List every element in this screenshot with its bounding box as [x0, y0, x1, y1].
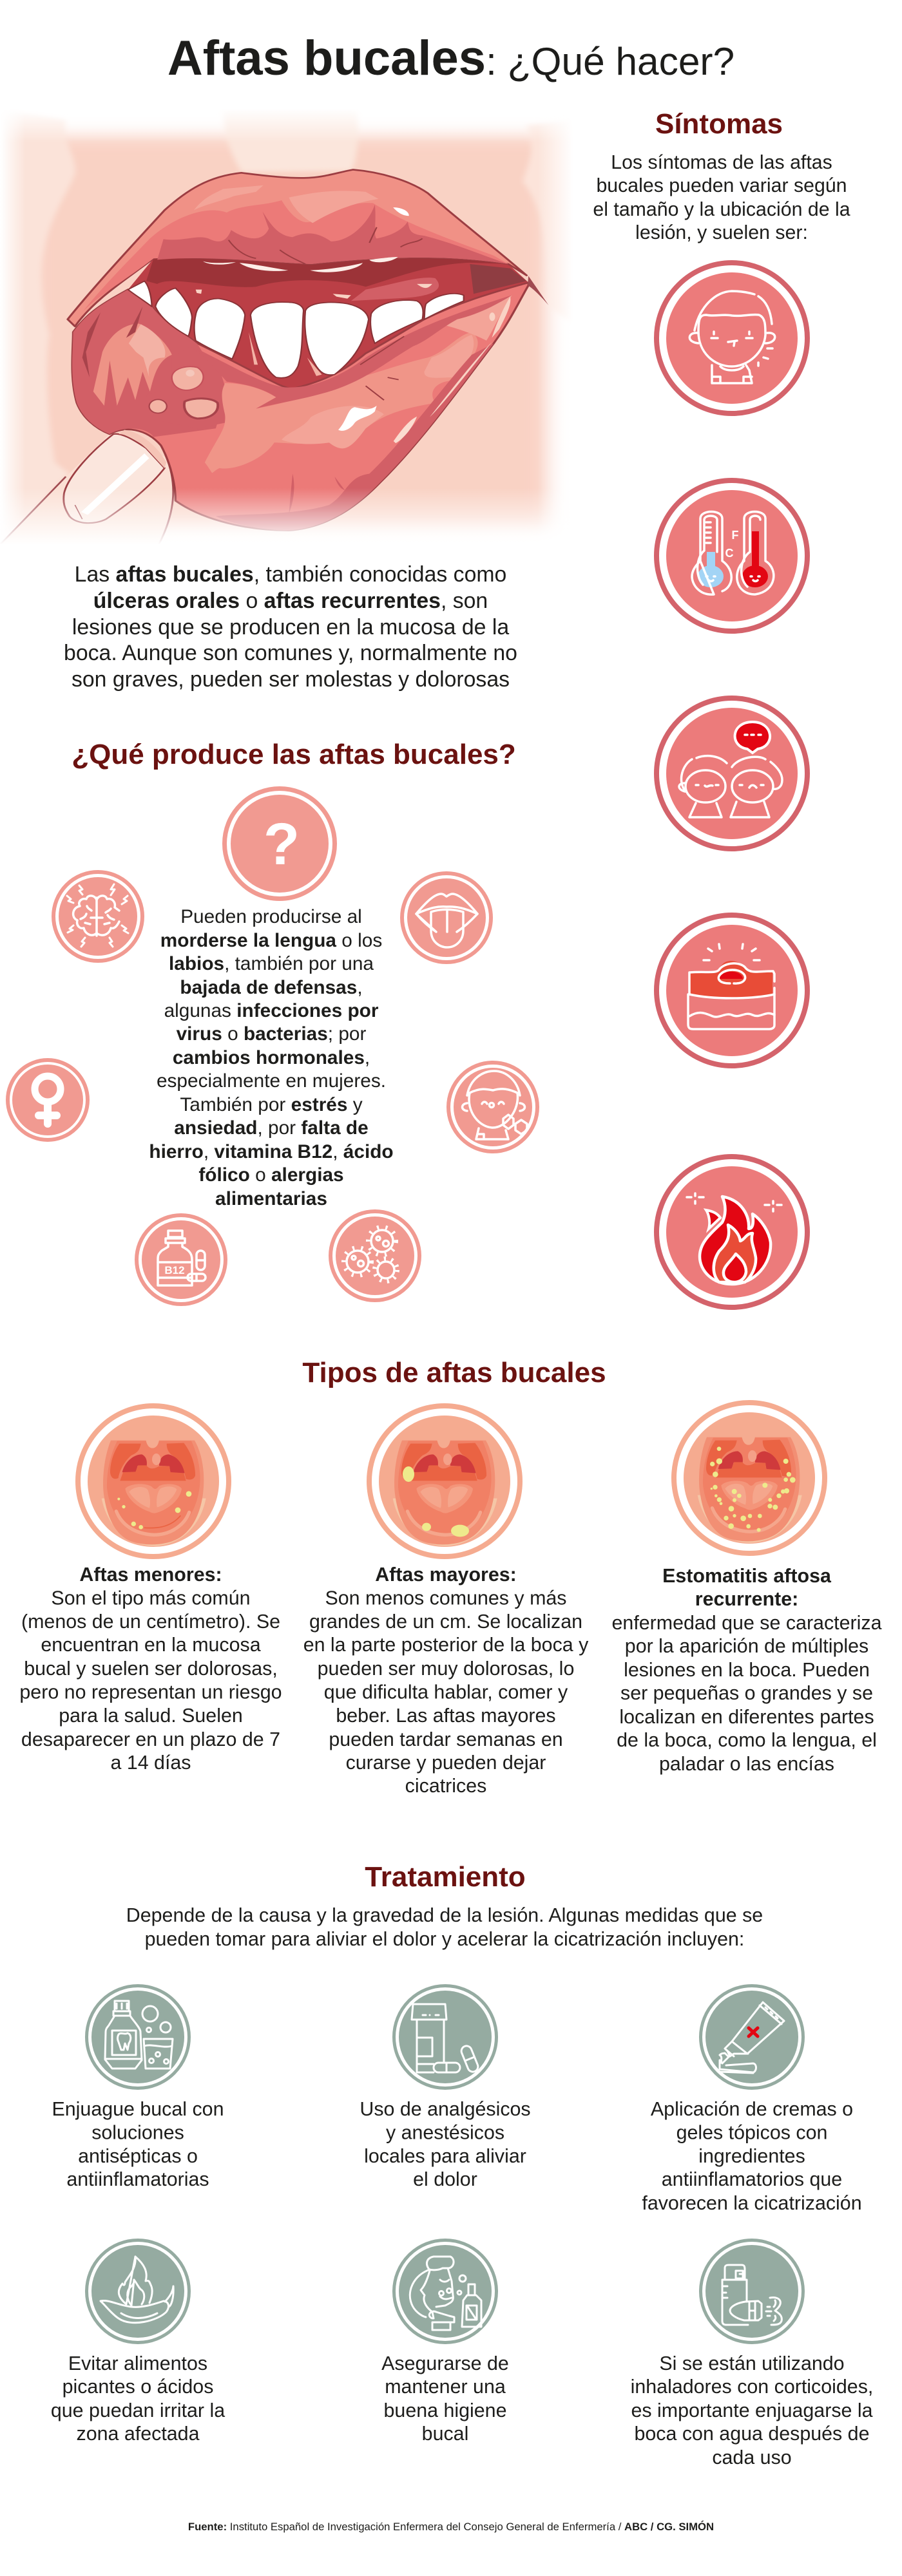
text: treatment 4: picantes o ácidos [62, 2376, 213, 2398]
icon: throat recurrent stomatitis [674, 1403, 825, 1553]
icon: tongue [402, 873, 491, 962]
text: treatment 2: y anestésicos [386, 2121, 504, 2143]
text: causes: hierro, vitamina B12, ácido [149, 1141, 394, 1162]
text: aftas menores [19, 1564, 282, 1774]
text: estomatitis aftosa recurrente: paladar o las encías [659, 1753, 834, 1775]
heading: tratamiento: Tratamiento [365, 1861, 526, 1893]
icon: vitamin B12: B12 [164, 1264, 185, 1276]
text: aftas mayores: curarse y pueden dejar [346, 1752, 546, 1774]
icon: mouthwash [86, 1986, 189, 2088]
text: treatment 3: geles tópicos con [676, 2121, 827, 2143]
intro text: Las aftas bucales, también conocidas como [75, 562, 506, 587]
icon: inhaler [701, 2240, 803, 2343]
icon: thermometers [657, 480, 807, 631]
text: treatment 6: es importante enjuagarse la [631, 2400, 873, 2421]
text: síntomas intro: el tamaño y la ubicación de la [593, 199, 850, 220]
text: tratamiento intro: Depende de la causa y la gravedad de la lesión. Algunas medidas que se [126, 1904, 763, 1926]
footer: source: Fuente: Instituto Español de Investigación Enfermera del Consejo General de Enfermería / ABC / CG. SIMÓN [188, 2521, 714, 2533]
text: treatment 1: antisépticas o [78, 2145, 198, 2167]
text: causes: También por estrés y [180, 1094, 363, 1115]
text: treatment 6: boca con agua después de [634, 2423, 870, 2445]
text: treatment 5: mantener una [385, 2376, 506, 2398]
text: treatment 5 [381, 2353, 509, 2445]
text: treatment 1: soluciones [91, 2121, 184, 2143]
text: estomatitis aftosa recurrente: por la aparición de múltiples [625, 1635, 868, 1657]
text: aftas mayores [303, 1564, 589, 1797]
text: aftas menores: encuentran en la mucosa [41, 1634, 261, 1656]
text: treatment 2: Uso de analgésicos [360, 2098, 531, 2120]
intro text: son graves, pueden ser molestas y dolorosas [72, 667, 510, 692]
text: estomatitis aftosa recurrente: ser pequeñas o grandes y se [620, 1682, 873, 1704]
title: Aftas bucales: ¿Qué hacer? [168, 31, 734, 86]
text: causes: alimentarias [215, 1188, 327, 1209]
text: aftas mayores: en la parte posterior de la boca y [303, 1634, 589, 1656]
text: síntomas intro: lesión, y suelen ser: [635, 222, 808, 243]
text: síntomas intro: Los síntomas de las aftas [611, 152, 832, 173]
text: treatment 1 [52, 2098, 224, 2190]
text: aftas mayores: que dificulta hablar, comer y [324, 1681, 568, 1703]
text: aftas menores: Aftas menores: [79, 1564, 222, 1586]
text: aftas mayores: pueden ser muy dolorosas, lo [318, 1658, 574, 1680]
text: aftas menores: (menos de un centímetro). Se [21, 1611, 280, 1633]
text: causes: ansiedad, por falta de [174, 1117, 369, 1139]
text: treatment 4: que puedan irritar la [51, 2400, 225, 2421]
heading: síntomas: Síntomas [655, 108, 783, 140]
heading: tipos: Tipos de aftas bucales [302, 1357, 606, 1388]
text: causes: especialmente en mujeres. [157, 1070, 386, 1092]
text: aftas mayores: grandes de un cm. Se localizan [309, 1611, 582, 1633]
heading: qué produce: ¿Qué produce las aftas bucales? [72, 739, 516, 770]
text: treatment 3: Aplicación de cremas o [651, 2098, 853, 2120]
text: causes: labios, también por una [169, 953, 374, 974]
icon: sick child [657, 263, 807, 413]
icon: question mark: ? [264, 811, 300, 877]
text: treatment 6: inhaladores con corticoides, [631, 2376, 873, 2398]
intro text [64, 562, 517, 692]
text: tratamiento intro [126, 1904, 763, 1950]
text: treatment 2 [360, 2098, 531, 2190]
text: estomatitis aftosa recurrente: enfermedad que se caracteriza [612, 1612, 882, 1634]
icon: cream tube [701, 1986, 803, 2088]
illustration: mouth with canker sores [2, 116, 566, 542]
text: aftas mayores: pueden tardar semanas en [329, 1728, 563, 1750]
icon: two children with speech bubble [657, 698, 807, 849]
text: causes: bajada de defensas, [180, 977, 363, 998]
text: treatment 1: Enjuague bucal con [52, 2098, 224, 2120]
text: treatment 3: ingredientes [698, 2145, 805, 2167]
text: aftas mayores: cicatrices [405, 1775, 486, 1797]
intro text: úlceras orales o aftas recurrentes, son [93, 589, 488, 613]
icon: child with allergy [448, 1063, 537, 1151]
text: treatment 5: bucal [422, 2423, 468, 2445]
text: aftas menores: pero no representan un riesgo [19, 1681, 282, 1703]
icon: ulcer tissue [657, 915, 807, 1066]
text: treatment 6 [631, 2353, 873, 2468]
intro text: boca. Aunque son comunes y, normalmente no [64, 641, 517, 665]
icon: chili and flame [86, 2240, 189, 2343]
text: treatment 3: favorecen la cicatrización [642, 2192, 862, 2214]
text: estomatitis aftosa recurrente [612, 1565, 882, 1775]
icon: question mark [224, 788, 335, 899]
text: causes: fólico o alergias [198, 1164, 344, 1186]
icon: thermometers: C [725, 547, 733, 560]
text: estomatitis aftosa recurrente: localizan en diferentes partes [619, 1706, 874, 1728]
text: treatment 3 [642, 2098, 862, 2214]
icon: stressed brain [53, 872, 142, 961]
text: aftas menores: bucal y suelen ser dolorosas, [24, 1658, 278, 1680]
text: aftas mayores: Aftas mayores: [375, 1564, 517, 1586]
text: treatment 3: antiinflamatorios que [662, 2168, 842, 2190]
text: treatment 6: Si se están utilizando [659, 2353, 845, 2374]
icon: burning flame [657, 1157, 807, 1307]
text: estomatitis aftosa recurrente: recurrente: [695, 1588, 798, 1610]
text: tratamiento intro: pueden tomar para aliviar el dolor y acelerar la cicatrización incluyen: [145, 1928, 744, 1950]
text: aftas mayores: beber. Las aftas mayores [336, 1705, 556, 1727]
text: síntomas intro: bucales pueden variar según [596, 175, 847, 196]
text: aftas menores: desaparecer en un plazo de 7 [21, 1728, 280, 1750]
text: treatment 2: locales para aliviar [364, 2145, 526, 2167]
intro text: lesiones que se producen en la mucosa de la [72, 615, 509, 639]
text: treatment 4 [51, 2353, 225, 2445]
icon: thermometers: F [732, 529, 738, 542]
icon: painkillers [394, 1986, 496, 2088]
icon: throat major ulcers [369, 1406, 520, 1557]
text: causes [149, 906, 394, 1209]
text: estomatitis aftosa recurrente: lesiones en la boca. Pueden [624, 1659, 870, 1681]
icon: female symbol [8, 1060, 88, 1140]
text: aftas menores: Son el tipo más común [51, 1587, 251, 1609]
text: treatment 6: cada uso [712, 2447, 792, 2468]
text: causes: virus o bacterias; por [177, 1023, 366, 1045]
text: treatment 1: antiinflamatorias [66, 2168, 209, 2190]
icon: vitamin B12 [137, 1215, 225, 1304]
text: aftas menores: a 14 días [110, 1752, 191, 1774]
text: treatment 5: buena higiene [384, 2400, 506, 2421]
text: síntomas intro [593, 152, 850, 243]
text: estomatitis aftosa recurrente: de la boca, como la lengua, el [617, 1729, 877, 1751]
text: treatment 5: Asegurarse de [381, 2353, 509, 2374]
icon: throat minor ulcers [78, 1406, 229, 1557]
text: causes: morderse la lengua o los [160, 930, 382, 951]
text: treatment 2: el dolor [413, 2168, 477, 2190]
text: treatment 4: Evitar alimentos [68, 2353, 207, 2374]
text: estomatitis aftosa recurrente: Estomatitis aftosa [662, 1565, 832, 1587]
icon: viruses and bacteria [331, 1211, 419, 1300]
text: aftas menores: para la salud. Suelen [59, 1705, 243, 1727]
text: aftas mayores: Son menos comunes y más [325, 1587, 567, 1609]
text: causes: Pueden producirse al [180, 906, 362, 927]
text: treatment 4: zona afectada [77, 2423, 200, 2445]
icon: man with oral hygiene [394, 2240, 496, 2343]
text: causes: algunas infecciones por [164, 1000, 379, 1021]
text: causes: cambios hormonales, [173, 1047, 370, 1068]
